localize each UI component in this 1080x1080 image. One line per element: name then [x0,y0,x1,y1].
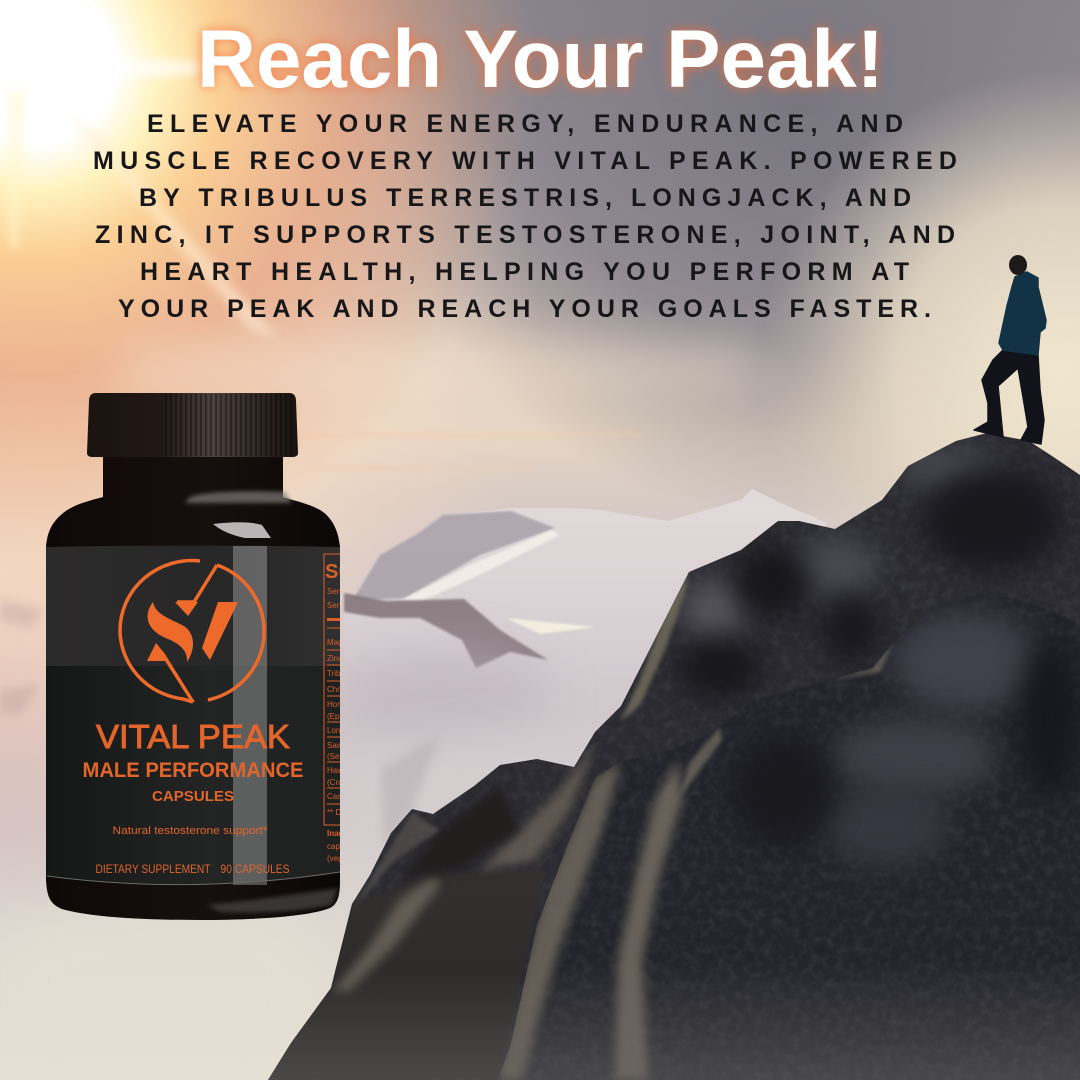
shaded peak face [352,511,555,601]
lit ridge on upper flank [620,572,689,722]
description text block: ZINC, IT SUPPORTS TESTOSTERONE, JOINT, AND [95,221,955,249]
logo check stroke [177,565,217,602]
supplement facts panel [324,554,340,862]
description text block: BY TRIBULUS TERRESTRIS, LONGJACK, AND [139,184,911,212]
label panel [46,546,340,885]
label text: DIETARY SUPPLEMENT [96,864,210,876]
mountain rock: back ridge [260,430,1080,1080]
supplement facts panel: Servings [327,601,358,610]
logo [120,561,264,702]
supplement facts panel: (vegeta [327,854,354,863]
supplement facts panel: Zinc (a [327,654,352,663]
lit snow ridge [402,530,560,602]
logo ring [120,561,264,702]
bottle neck highlight [185,491,292,503]
frozen lake highlight [506,618,595,634]
person: jacket [999,272,1046,355]
supplement facts panel: Magnes [327,638,355,647]
supplement facts panel: Serving [327,587,354,596]
supplement facts panel: (Crata [327,778,350,787]
product bottle [46,393,340,920]
lit ridge descending left [480,740,597,870]
main snow peak [344,489,827,760]
description text block: ELEVATE YOUR ENERGY, ENDURANCE, AND [147,110,903,138]
supplement facts panel: Inacti [327,829,348,838]
logo V [202,602,238,660]
person standing on summit [974,255,1046,444]
supplement facts panel: Saw Pal [327,741,357,750]
supplement facts panel: (Epim [327,712,348,721]
label text: CAPSULES [152,788,234,805]
person: legs and boots [974,350,1044,444]
description text block: MUSCLE RECOVERY WITH VITAL PEAK. POWERED [93,147,957,175]
supplement facts panel: (Seren [327,752,351,761]
mountain rock: front ridge [490,590,1080,1080]
label text: Natural testosterone support* [112,825,268,837]
lower-left rock mass [268,868,545,1080]
supplement facts panel: Tribulus [327,669,355,678]
bottle body [46,455,340,920]
supplement facts panel: Hawth [327,766,350,775]
description text block: HEART HEALTH, HELPING YOU PERFORM AT [140,258,909,286]
bottle base highlight [207,888,338,913]
person: head [1009,255,1027,275]
supplement facts panel: Supp [325,561,375,583]
supplement facts panel: Chrysin [327,685,354,694]
description text block [93,110,957,323]
lit streak left [498,761,621,1080]
logo lower triangle [147,643,195,702]
label text: VITAL PEAK [96,718,290,755]
logo S [148,602,193,662]
title: Reach Your Peak! [197,14,884,105]
label text [82,718,304,876]
bottle cap [87,393,298,457]
label text: 90 CAPSULES [220,864,290,876]
lit streak centre [615,760,682,1080]
rocky ridge [344,593,548,668]
shadowed face [400,785,520,880]
label text: MALE PERFORMANCE [82,759,304,782]
description text block: YOUR PEAK AND REACH YOUR GOALS FASTER. [118,295,931,323]
supplement facts panel: Cassia [327,792,352,801]
distant snowy mountains [0,489,827,1080]
supplement facts panel: capsule [327,842,355,851]
supplement facts panel: ** Daily [327,808,353,817]
supplement facts panel: Longjack [327,726,360,735]
bottle shoulder highlight [213,522,271,538]
supplement facts panel: Horny [327,700,348,709]
lit ridge lower-left rock [333,875,440,992]
lit streak upper [678,643,893,800]
